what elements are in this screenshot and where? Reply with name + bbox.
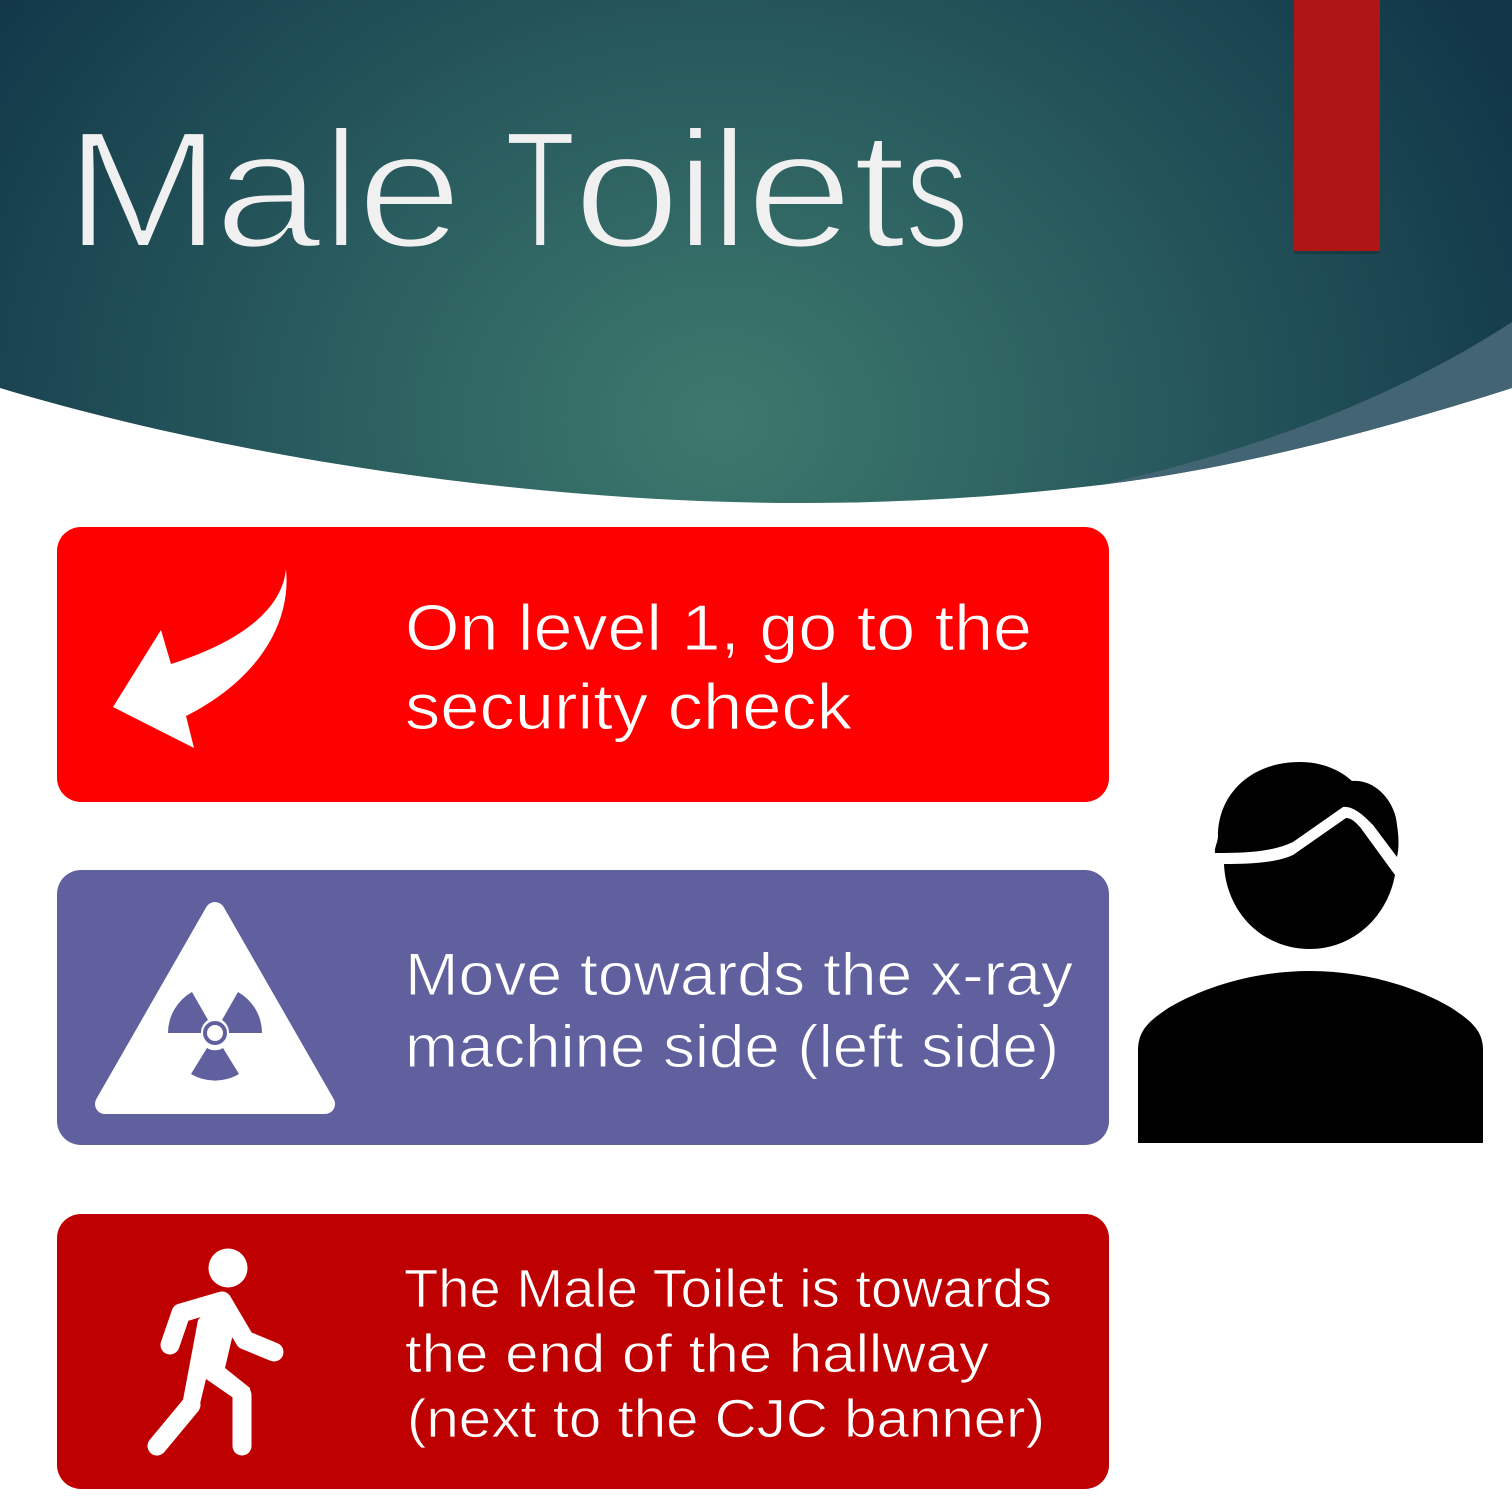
face	[1224, 818, 1395, 949]
title: T	[505, 97, 576, 283]
step 3 text: the end of the hallway	[405, 1324, 989, 1384]
title: t	[852, 97, 906, 283]
title: a	[214, 97, 322, 283]
step 2 text: machine side (left side)	[405, 1013, 1059, 1080]
step 2 text	[405, 941, 1073, 1080]
title: s	[905, 97, 969, 283]
icon: radiation warning triangle	[105, 912, 325, 1104]
hair	[1215, 762, 1398, 857]
step 1 text: security check	[405, 670, 853, 743]
panel: step 2	[57, 870, 1109, 1145]
title: M	[65, 97, 221, 283]
header banner	[0, 0, 1512, 503]
panel: step 3	[57, 1214, 1109, 1489]
icon: male person silhouette	[1138, 762, 1483, 1143]
step 3 text	[404, 1259, 1052, 1449]
title: e	[746, 97, 854, 283]
step 2 text: Move towards the x-ray	[405, 941, 1073, 1008]
step 1 text	[405, 591, 1032, 743]
shoulders	[1138, 971, 1483, 1143]
title: i	[677, 97, 714, 283]
icon: walking person	[157, 1248, 274, 1446]
title: o	[573, 97, 681, 283]
step 3 text: (next to the CJC banner)	[407, 1389, 1045, 1449]
header wave accent	[1100, 322, 1512, 485]
red ribbon	[1294, 0, 1380, 254]
panel: step 1	[57, 527, 1109, 802]
step 1 text: On level 1, go to the	[405, 591, 1032, 664]
title: l	[711, 97, 748, 283]
title: e	[357, 97, 463, 283]
step 3 text: The Male Toilet is towards	[404, 1259, 1052, 1319]
icon: curved arrow	[113, 569, 287, 748]
title: l	[324, 97, 358, 283]
